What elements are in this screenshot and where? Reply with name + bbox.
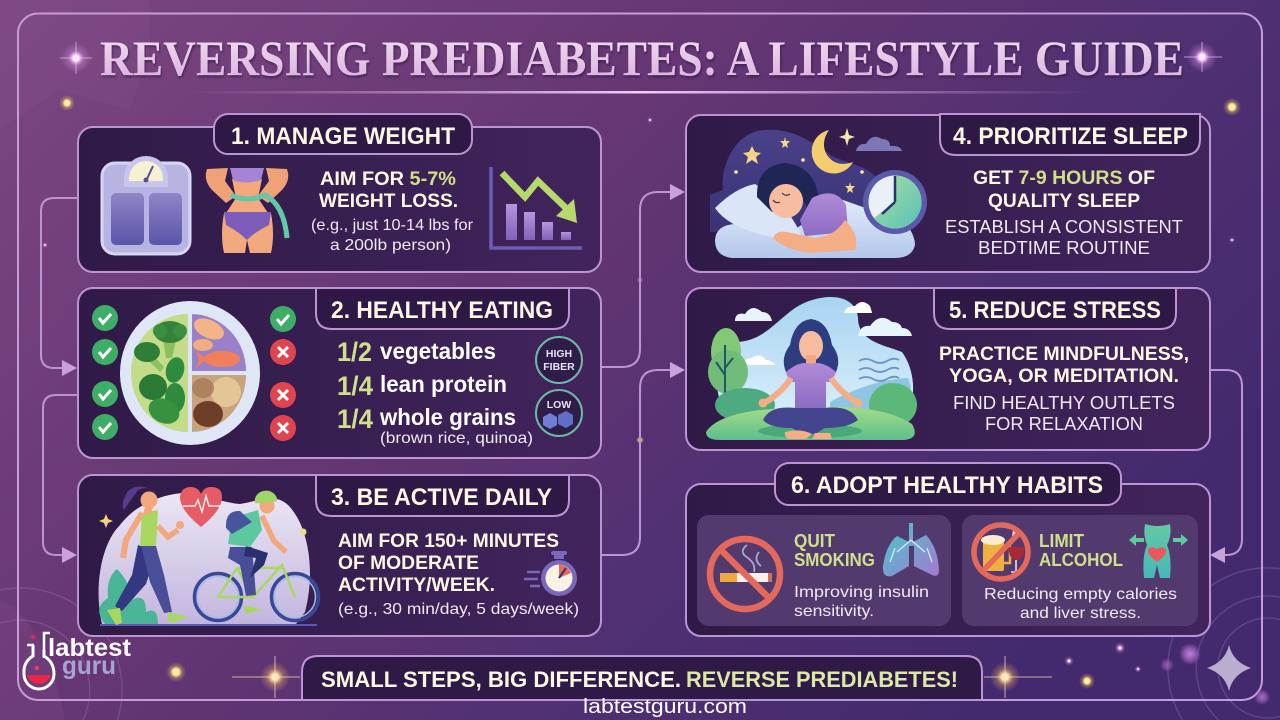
panel 5: reduce stress (686, 288, 1210, 450)
heading tab 5 (934, 288, 1176, 329)
icon: divided plate (120, 301, 260, 445)
text: plate portions: 1/4 (337, 371, 373, 401)
text: sleep goal: QUALITY SLEEP (988, 191, 1140, 212)
waves (859, 359, 899, 381)
ground (706, 407, 915, 440)
text: activity goal: AIM FOR 150+ MINUTES (338, 531, 559, 552)
text: stress tips (939, 344, 1189, 434)
card: limit alcohol: Reducing empty calories (984, 586, 1177, 603)
heading tab 6: 6. ADOPT HEALTHY HABITS (791, 472, 1103, 499)
heading tab 2: 2. HEALTHY EATING (331, 297, 553, 324)
text: quit smoking: QUIT (794, 531, 835, 551)
tree (711, 328, 741, 376)
clock (863, 170, 927, 234)
hair (784, 319, 838, 372)
badge: low sugar: LOW (547, 399, 571, 411)
protein and fish (191, 314, 227, 344)
text: activity goal: (e.g., 30 min/day, 5 days/week) (338, 601, 579, 618)
connector arrows (41, 184, 1242, 563)
card: limit alcohol: ALCOHOL (1039, 550, 1123, 570)
icons: check marks and crosses (92, 305, 296, 441)
footer website: labtestguru.com (583, 696, 747, 718)
card: quit smoking (697, 515, 951, 626)
text: plate portions: lean protein (380, 371, 507, 397)
text: plate portions: vegetables (380, 338, 496, 364)
logo: labtest guru: labtest (48, 634, 132, 662)
text: sleep goal: ESTABLISH A CONSISTENT (945, 217, 1183, 237)
text: activity goal: OF MODERATE (338, 553, 479, 574)
text: plate portions: (brown rice, quinoa) (380, 430, 533, 447)
bushes (715, 388, 775, 422)
text: plate portions: 1/4 (337, 404, 373, 434)
heading tab 1: 1. MANAGE WEIGHT (231, 123, 455, 150)
badge: high fiber: FIBER (543, 361, 575, 373)
sparkle (99, 514, 113, 528)
walker (115, 545, 156, 611)
title underline glow (190, 91, 1090, 94)
text: activity goal (338, 531, 579, 618)
text: stress tips: PRACTICE MINDFULNESS, (939, 344, 1189, 365)
heading tab 4 (940, 114, 1200, 155)
heading tab 1 (214, 114, 472, 154)
badge: high fiber (536, 337, 582, 383)
plant (99, 569, 158, 624)
card: quit smoking: sensitivity. (794, 603, 874, 620)
arrow: step 5 to step 6 (1210, 370, 1242, 563)
text: sleep goal: BEDTIME ROUTINE (978, 238, 1150, 258)
panel 3: be active daily (78, 475, 601, 636)
clouds (735, 302, 912, 365)
heading tab 5: 5. REDUCE STRESS (949, 297, 1161, 324)
text: weight goal: (e.g., just 10-14 lbs for (311, 217, 474, 234)
text: limit alcohol: LIMIT (1039, 531, 1084, 551)
bottom banner: REVERSE PREDIABETES! (686, 667, 958, 692)
text: stress tips: FIND HEALTHY OUTLETS (953, 393, 1175, 413)
cyclist (228, 547, 256, 596)
bottom banner (302, 656, 982, 700)
cyclist wheels and frame (194, 565, 318, 620)
icon: flask (24, 633, 54, 689)
decorative four-point star (1207, 645, 1251, 691)
icon: no smoking (710, 539, 780, 609)
icon: bathroom scale (102, 156, 190, 254)
text: stress tips: YOGA, OR MEDITATION. (949, 366, 1179, 387)
arrow: step 3 to step 5 (601, 362, 685, 555)
card: limit alcohol: and liver stress. (1020, 605, 1141, 622)
title: REVERSING PREDIABETES: A LIFESTYLE GUIDE (100, 30, 1184, 86)
icon: stopwatch (524, 551, 577, 596)
text: sleep goal: GET 7-9 HOURS OF (973, 168, 1155, 189)
text: stress tips: FOR RELAXATION (985, 414, 1143, 434)
illustration: woman meditating (706, 297, 917, 440)
arrow: step 2 to step 4 (601, 184, 685, 367)
arrow: step 1 to step 2 (41, 198, 77, 376)
text: sleep goal (945, 168, 1183, 258)
card: limit alcohol (962, 515, 1198, 626)
icon: falling bar chart (491, 167, 582, 248)
heading tab 3: 3. BE ACTIVE DAILY (331, 484, 552, 511)
heading tab 4: 4. PRIORITIZE SLEEP (953, 123, 1188, 150)
icon: body with heart and arrows (1129, 524, 1188, 578)
bottom banner: SMALL STEPS, BIG DIFFERENCE. (321, 667, 681, 692)
heart with ECG (180, 487, 222, 527)
logo: labtest guru (24, 633, 132, 689)
icon: no alcohol (974, 525, 1028, 579)
text: weight goal (311, 169, 474, 254)
text: plate portions: whole grains (379, 404, 516, 430)
badge: high fiber: HIGH (546, 348, 572, 360)
text: weight goal: WEIGHT LOSS. (319, 191, 458, 212)
badge: low sugar (536, 390, 582, 436)
icon: lungs (883, 523, 939, 576)
card: quit smoking: Improving insulin (794, 584, 929, 601)
text: plate portions: 1/2 (337, 337, 372, 367)
heading tab 2 (316, 288, 569, 329)
text: activity goal: ACTIVITY/WEEK. (338, 575, 495, 596)
text: weight goal: AIM FOR 5-7% (320, 169, 456, 190)
arrow: step 2 to step 3 (43, 395, 77, 563)
text: plate portions (337, 337, 533, 447)
grains (211, 377, 241, 407)
panel 1: manage weight (78, 114, 601, 272)
illustration: walker and cyclist (99, 486, 318, 625)
illustration: woman sleeping (710, 128, 927, 258)
panel 2: healthy eating (78, 288, 601, 458)
heading tab 3 (316, 475, 569, 516)
logo: labtest guru: guru (62, 652, 116, 680)
hair, face, shirt, arm (757, 163, 832, 216)
panel 4: prioritize sleep (686, 114, 1210, 272)
card: quit smoking: SMOKING (794, 550, 875, 570)
broccoli and spinach (134, 321, 187, 429)
face and body (799, 331, 823, 361)
blanket and pillow (715, 200, 915, 258)
icon: waist with measuring tape (206, 168, 288, 253)
heading tab 6 (775, 463, 1121, 505)
text: weight goal: a 200lb person) (330, 237, 451, 254)
panel 6: adopt healthy habits (686, 463, 1210, 636)
